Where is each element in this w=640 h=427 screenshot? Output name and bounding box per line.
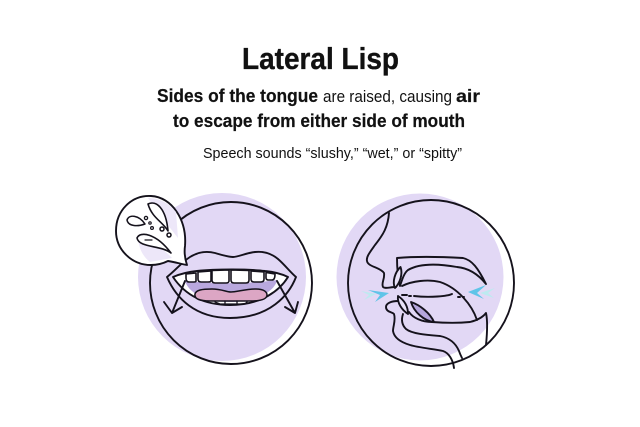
left air arrow pale [361, 291, 376, 300]
speech bubble [116, 196, 187, 265]
mouth opening [173, 270, 288, 305]
inner throat line [402, 314, 462, 358]
air dashed line [402, 294, 464, 297]
illustration: side view of mouth [336, 194, 514, 368]
subtitle: air [456, 86, 480, 106]
left air arrow [368, 290, 389, 302]
palate [397, 257, 486, 286]
illustration: front view of mouth [116, 193, 312, 364]
description: Speech sounds “slushy,” “wet,” or “spitty” [203, 145, 462, 162]
under-tongue [411, 302, 434, 322]
tongue [195, 289, 267, 301]
lips [167, 252, 296, 318]
lower tooth [398, 296, 408, 314]
lavender circle [138, 193, 306, 361]
face profile [367, 213, 396, 288]
floor of mouth [409, 312, 487, 345]
lower lip and jaw [386, 301, 454, 368]
left arrow [164, 281, 185, 313]
droplets [148, 203, 168, 231]
outline circle [348, 200, 514, 366]
tongue [402, 281, 477, 320]
right air arrow pale [480, 288, 495, 298]
subtitle: to escape from either side of mouth [173, 110, 465, 131]
lower teeth [215, 301, 247, 304]
lavender circle [336, 194, 504, 360]
inner mouth [185, 280, 277, 302]
upper tooth [394, 267, 401, 288]
subtitle: Sides of the tongue [157, 85, 318, 106]
bubble shading [138, 198, 178, 262]
title: Lateral Lisp [242, 41, 399, 76]
right air arrow [468, 285, 486, 299]
subtitle: are raised, causing [323, 87, 452, 106]
subtitle [157, 85, 480, 131]
upper teeth [186, 270, 275, 283]
right arrow [277, 281, 298, 313]
outline circle [150, 202, 312, 364]
